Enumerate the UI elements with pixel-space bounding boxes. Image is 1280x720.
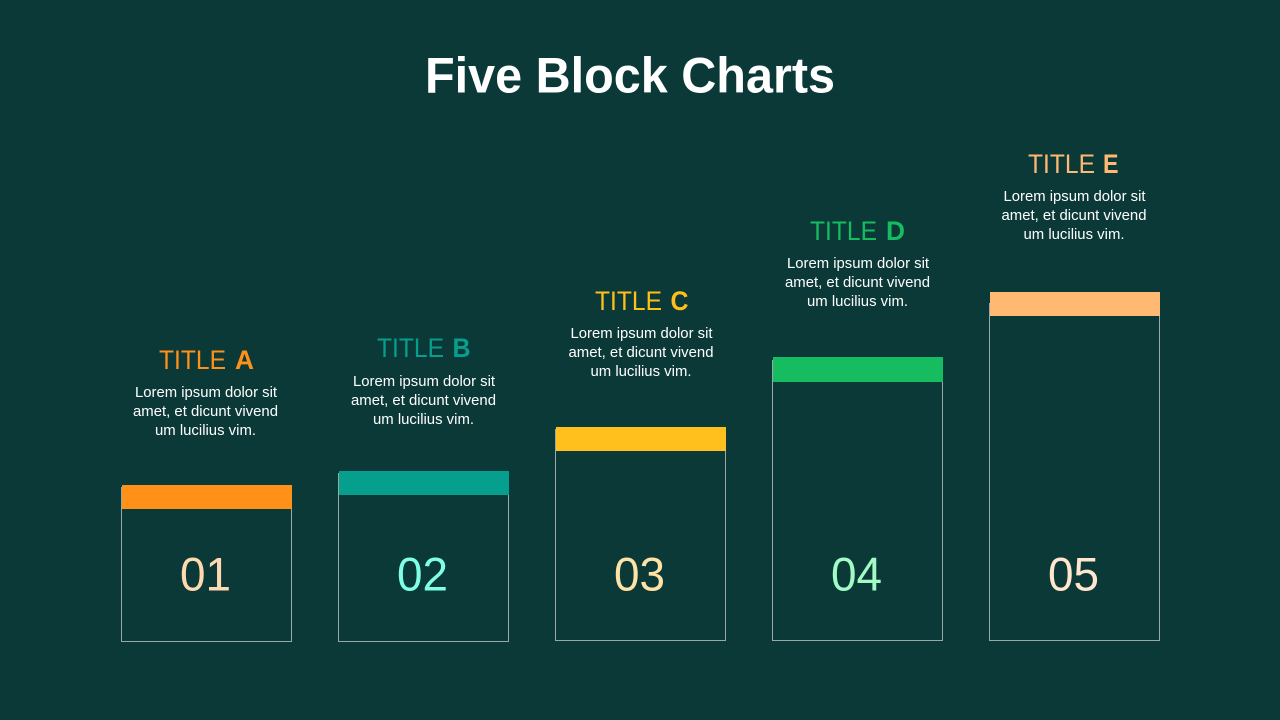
text block: description E: Lorem ipsum dolor sit (1004, 189, 1146, 205)
colour bar E (990, 292, 1160, 316)
number 04: 04 (831, 548, 882, 600)
heading: title E: E (1103, 149, 1118, 179)
text block: description E: um lucilius vim. (1024, 227, 1124, 243)
heading: title D: D (886, 216, 905, 246)
text block: description B (351, 374, 496, 428)
heading: title B: B (452, 333, 470, 363)
heading: title C: C (670, 286, 688, 316)
text block: description B: um lucilius vim. (373, 412, 474, 428)
colour bar A (122, 485, 292, 509)
text block: description D: amet, et dicunt vivend (785, 275, 930, 291)
text block: description E: amet, et dicunt vivend (1002, 208, 1146, 224)
number 05: 05 (1048, 548, 1099, 600)
text block: description D: Lorem ipsum dolor sit (787, 256, 929, 272)
title: Five Block Charts (425, 48, 835, 104)
text block: description E (1002, 189, 1146, 243)
text block: description A: um lucilius vim. (155, 423, 256, 439)
colour bar D (773, 357, 943, 382)
text block: description C: amet, et dicunt vivend (568, 345, 714, 361)
heading: title D: TITLE (810, 216, 877, 246)
heading: title A: A (235, 345, 254, 375)
text block: description A: Lorem ipsum dolor sit (135, 385, 277, 401)
text block: description C (568, 326, 714, 380)
block outline B (338, 474, 508, 642)
number 03: 03 (614, 548, 665, 600)
heading: title C: TITLE (595, 286, 662, 316)
heading: title B: TITLE (377, 333, 444, 363)
panel: block C (556, 286, 726, 640)
panel: block B (338, 333, 509, 642)
panel: block A (122, 345, 292, 642)
block outline D (772, 360, 942, 640)
number 02: 02 (397, 548, 448, 600)
text block: description C: um lucilius vim. (590, 364, 692, 380)
panel: block E (990, 149, 1160, 640)
block outline C (556, 430, 726, 640)
text block: description A: amet, et dicunt vivend (133, 404, 278, 420)
text block: description D: um lucilius vim. (807, 294, 908, 310)
text block: description B: Lorem ipsum dolor sit (353, 374, 495, 390)
text block: description A (133, 385, 278, 439)
colour bar B (339, 471, 509, 495)
block outline E (990, 304, 1160, 640)
colour bar C (556, 427, 726, 451)
text block: description D (785, 256, 930, 310)
heading: title A: TITLE (159, 345, 226, 375)
number 01: 01 (180, 548, 231, 600)
block outline A (122, 488, 292, 642)
panel: block D (772, 216, 943, 640)
text block: description B: amet, et dicunt vivend (351, 393, 496, 409)
text block: description C: Lorem ipsum dolor sit (570, 326, 712, 342)
heading: title E: TITLE (1028, 149, 1095, 179)
